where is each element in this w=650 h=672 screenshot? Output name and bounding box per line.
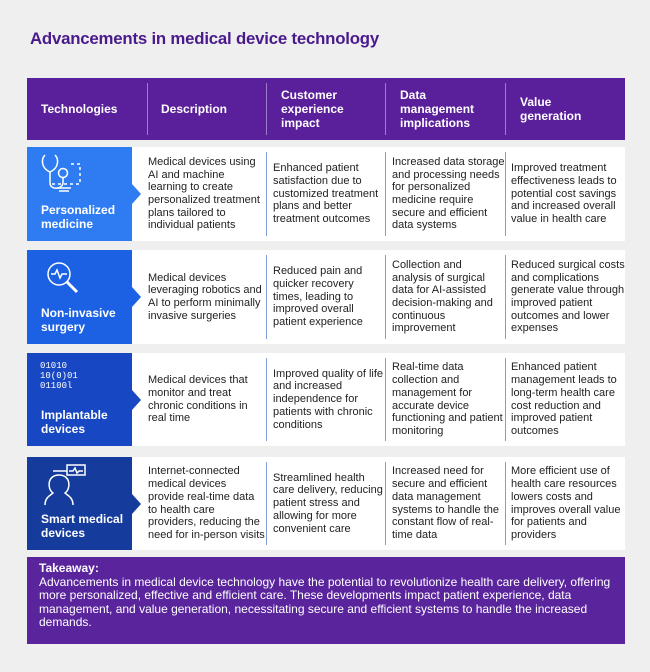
row: personalized medicine: Improved treatment effectiveness leads to potential cost savings and increased overall value in health care xyxy=(511,162,617,225)
header bar: generation xyxy=(520,109,581,123)
tech: implantable devices: devices xyxy=(41,422,85,436)
icon: magnifier xyxy=(47,262,78,293)
header bar: Customer xyxy=(281,88,337,102)
tech: implantable devices: Implantable xyxy=(41,408,108,422)
header bar xyxy=(27,78,625,140)
row: personalized medicine: Enhanced patient satisfaction due to customized treatment plans and better treatment outcomes xyxy=(273,162,378,225)
row: implantable devices: Medical devices that monitor and treat chronic conditions in real time xyxy=(148,374,248,424)
takeaway: Takeaway: xyxy=(39,561,99,575)
icon: binary: 01010 xyxy=(40,361,67,371)
icon: binary: 10(0)01 xyxy=(40,371,78,381)
row: personalized medicine xyxy=(27,147,625,241)
takeaway: Advancements in medical device technology have the potential to revolutionize health care delivery, offering more personalized, effective and efficient care. These developments impact patient experience, data management, and value generation, necessitating secure and efficient systems to handle the increased demands. xyxy=(39,574,610,629)
row: non-invasive surgery: Medical devices leveraging robotics and AI to perform minimally invasive surgeries xyxy=(148,272,262,322)
tech: personalized medicine xyxy=(27,147,132,241)
row: smart medical devices: Increased need for secure and efficient data management systems to handle the constant flow of real-time data xyxy=(392,465,499,541)
takeaway xyxy=(27,557,625,644)
header bar: Data xyxy=(400,88,426,102)
tech: personalized medicine: Personalized xyxy=(41,203,115,217)
tech: non-invasive surgery xyxy=(27,250,132,344)
icon: binary: 01100l xyxy=(40,381,72,391)
title: Advancements in medical device technology xyxy=(30,29,379,48)
row: non-invasive surgery: Collection and analysis of surgical data for AI-assisted decision-making and continuous improvement xyxy=(392,259,493,334)
row: smart medical devices: Streamlined health care delivery, reducing patient stress and allowing for more convenient care xyxy=(273,472,383,535)
row: personalized medicine: Medical devices using AI and machine learning to create personalized treatment plans tailored to individual patients xyxy=(148,156,260,231)
row: personalized medicine: Increased data storage and processing needs for personalized medicine require secure and efficient data systems xyxy=(392,156,505,231)
header bar: impact xyxy=(281,116,320,130)
tech: non-invasive surgery: Non-invasive xyxy=(41,306,116,320)
row: smart medical devices: Internet-connected medical devices provide real-time data to health care providers, reducing the need for in-person visits xyxy=(148,465,265,541)
tech: smart medical devices: devices xyxy=(41,526,85,540)
row: implantable devices: Enhanced patient management leads to long-term health care cost reduction and improved patient outcomes xyxy=(511,361,617,437)
row: smart medical devices xyxy=(27,457,625,550)
icon: head with monitor xyxy=(44,464,86,505)
row: non-invasive surgery: Reduced pain and quicker recovery times, leading to improved overall patient experience xyxy=(273,265,363,328)
tech: personalized medicine: medicine xyxy=(41,217,93,231)
row: implantable devices: Improved quality of life and increased independence for patients with chronic conditions xyxy=(273,368,383,431)
row: smart medical devices: More efficient use of health care resources lowers costs and improves overall value for patients and providers xyxy=(511,465,620,541)
icon: stethoscope xyxy=(42,154,81,192)
row: implantable devices xyxy=(27,353,625,446)
header bar: experience xyxy=(281,102,344,116)
tech: smart medical devices xyxy=(27,457,132,550)
row: non-invasive surgery xyxy=(27,250,625,344)
header bar: Technologies xyxy=(41,102,117,116)
tech: non-invasive surgery: surgery xyxy=(41,320,85,334)
row: implantable devices: Real-time data collection and management for accurate device functioning and patient monitoring xyxy=(392,361,503,437)
row: non-invasive surgery: Reduced surgical costs and complications generate value through improved patient outcomes and lower expenses xyxy=(511,259,625,334)
header bar: implications xyxy=(400,116,470,130)
header bar: management xyxy=(400,102,474,116)
tech: implantable devices xyxy=(27,353,132,446)
header bar: Description xyxy=(161,102,227,116)
icon: binary xyxy=(40,361,78,391)
header bar: Value xyxy=(520,95,551,109)
tech: smart medical devices: Smart medical xyxy=(41,512,123,526)
